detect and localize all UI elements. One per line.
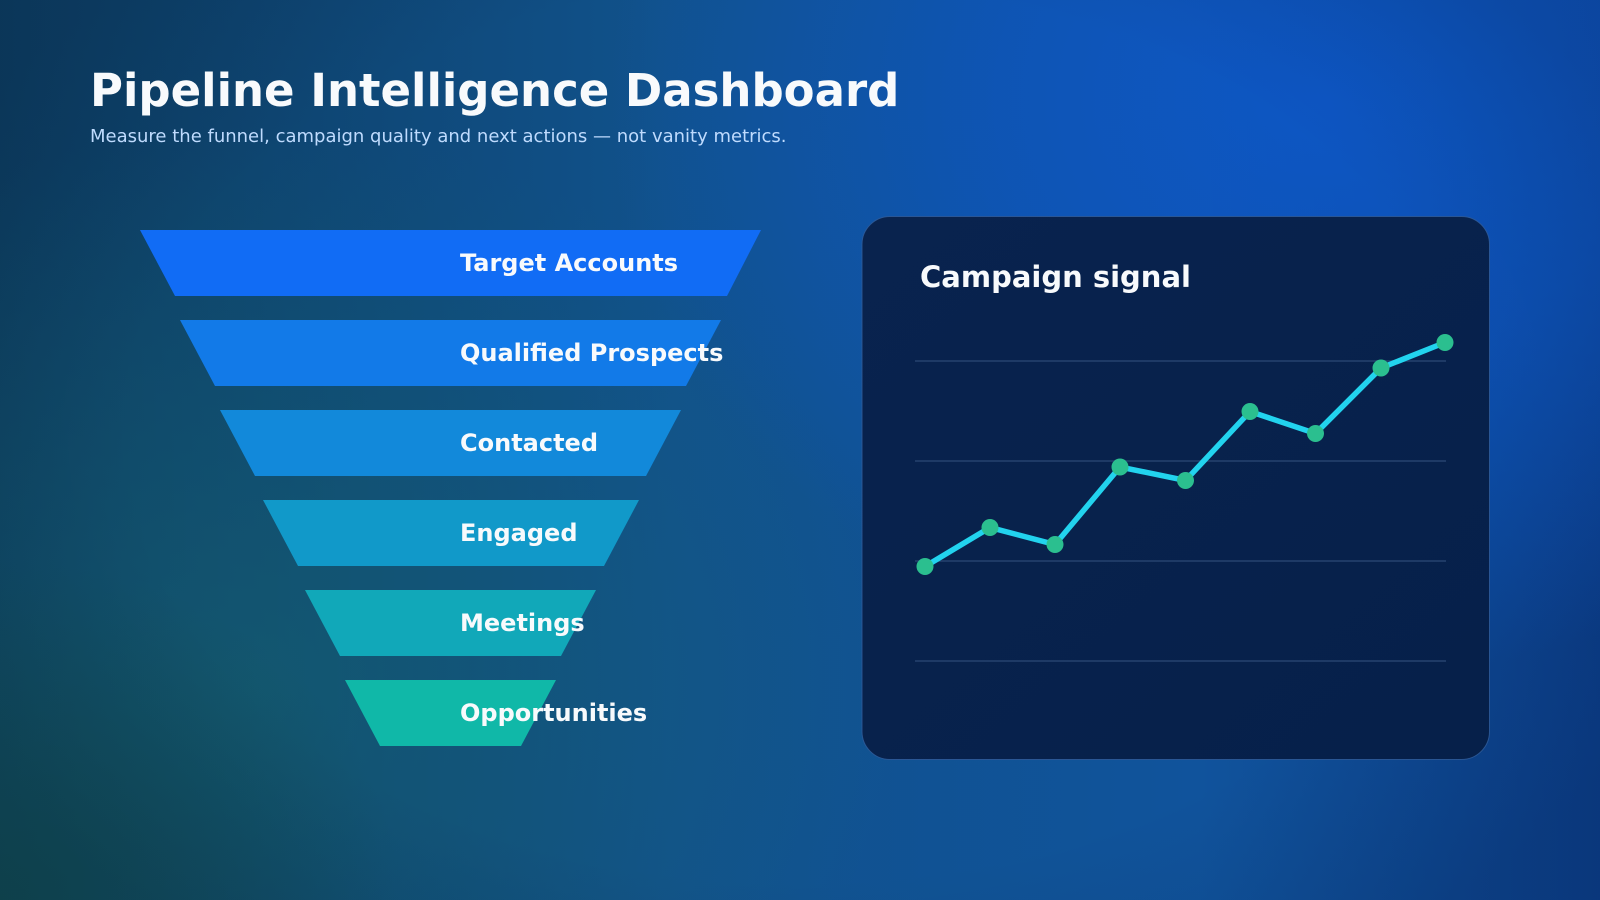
panel: campaign signal xyxy=(862,216,1490,760)
line chart xyxy=(916,334,1454,575)
label: Engaged: Engaged xyxy=(460,519,578,547)
panel heading: Campaign signal xyxy=(920,260,1191,294)
title: Pipeline Intelligence Dashboard xyxy=(90,64,899,117)
label: Contacted: Contacted xyxy=(460,429,598,457)
funnel stage: Engaged xyxy=(263,500,639,566)
label: Target Accounts: Target Accounts xyxy=(460,249,678,277)
funnel stage: Qualified Prospects xyxy=(180,320,721,386)
funnel chart xyxy=(140,230,761,746)
funnel stage: Contacted xyxy=(220,410,681,476)
subtitle: Measure the funnel, campaign quality and next actions — not vanity metrics. xyxy=(90,126,787,147)
label: Meetings: Meetings xyxy=(460,609,585,637)
funnel stage: Opportunities xyxy=(345,680,556,746)
funnel stage: Target Accounts xyxy=(140,230,761,296)
label: Opportunities: Opportunities xyxy=(460,699,647,727)
funnel stage: Meetings xyxy=(305,590,596,656)
label: Qualified Prospects: Qualified Prospects xyxy=(460,339,723,367)
